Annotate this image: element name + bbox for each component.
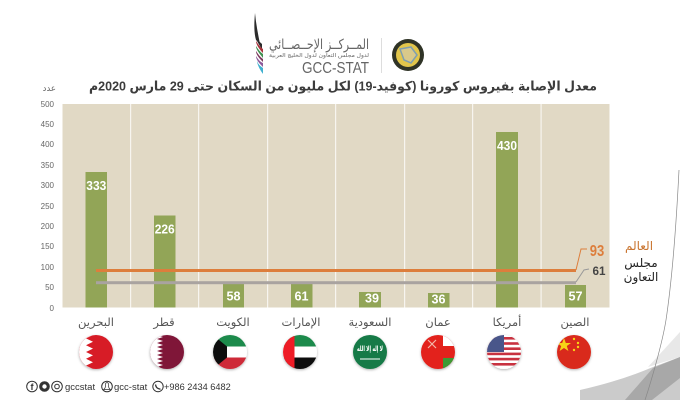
GCC average line	[96, 281, 576, 284]
flag: China	[557, 335, 591, 369]
flag: UAE	[283, 335, 317, 369]
country labels: الإمارات	[282, 317, 320, 330]
icon: twitter	[39, 381, 50, 392]
icon: instagram	[52, 381, 62, 392]
country labels: عمان	[425, 317, 451, 329]
country labels: قطر	[152, 317, 175, 330]
bar: Qatar 226: 226	[155, 222, 175, 236]
bar: UAE 61: 61	[294, 288, 308, 304]
value: world 93: 93	[590, 243, 604, 260]
logo GCC-STAT wordmark: GCC-STAT	[302, 60, 369, 77]
y-axis labels: 250	[41, 202, 55, 211]
logo: GCC-STAT	[254, 13, 424, 77]
y-axis labels	[41, 100, 55, 313]
flag: Qatar	[150, 335, 184, 369]
social contact bar	[27, 381, 231, 393]
bar: China 57	[565, 285, 586, 308]
logo ribbon	[254, 13, 263, 74]
bar: Oman 36: 36	[432, 292, 446, 306]
icon: snapchat	[102, 381, 112, 392]
decorative corner swoosh	[580, 170, 680, 400]
flag: Oman	[421, 335, 455, 369]
y-axis labels: 100	[41, 263, 55, 272]
handle: gccstat: gccstat	[65, 382, 95, 393]
logo Arabic name: المــركــز الإحــصــائي	[269, 36, 369, 53]
icon: facebook: f	[30, 382, 34, 392]
bar: USA 430	[496, 132, 518, 308]
bar: Oman 36	[428, 292, 450, 308]
flag: Bahrain	[79, 335, 113, 369]
bar chart	[62, 104, 610, 308]
y-axis labels: 0	[50, 304, 55, 313]
y-axis labels: 400	[41, 140, 55, 149]
bar: Saudi Arabia 39: 39	[365, 290, 379, 306]
icon: whatsapp	[153, 381, 163, 392]
country labels	[78, 314, 589, 330]
country labels: الكويت	[216, 317, 250, 330]
flag: Saudi Arabia: لا إله إلا الله	[357, 344, 383, 353]
bar: Kuwait 58: 58	[226, 288, 240, 304]
legend: GCC: مجلس	[624, 256, 658, 271]
y-axis labels: 150	[41, 242, 55, 251]
value: GCC 61: 61	[592, 266, 606, 278]
handle: gcc-stat: gcc-stat	[114, 382, 148, 393]
bar: China 57: 57	[568, 288, 582, 304]
bar: Qatar 226	[154, 216, 176, 308]
logo subtitle: لدول مجلس التعاون لدول الخليج العربية	[269, 53, 369, 59]
y-axis labels: 450	[41, 120, 55, 129]
legend: GCC	[624, 256, 658, 285]
country labels: السعودية	[349, 317, 391, 330]
plot area	[62, 104, 610, 308]
bar: Bahrain 333	[86, 172, 107, 308]
title: معدل الإصابة بفيروس كورونا (كوفيد-19) لكل مليون من السكان حتى 29 مارس 2020م	[89, 78, 597, 94]
leader: world	[576, 249, 587, 270]
bar: Saudi Arabia 39	[359, 290, 381, 308]
bar: Bahrain 333: 333	[86, 178, 106, 193]
y-axis labels: 500	[41, 100, 55, 109]
logo divider	[381, 38, 382, 73]
y-axis labels: 300	[41, 181, 55, 190]
y-axis labels: 50	[45, 283, 55, 292]
icon: facebook	[27, 381, 37, 392]
y-axis labels: 350	[41, 161, 55, 170]
bar: USA 430: 430	[497, 138, 517, 153]
bar: UAE 61	[291, 283, 312, 308]
bar: Kuwait 58	[223, 284, 244, 308]
legend: GCC: التعاون	[624, 270, 658, 285]
legend: world: العالم	[625, 239, 653, 253]
flag: Kuwait	[213, 335, 247, 369]
country labels: البحرين	[78, 317, 114, 330]
country labels: أمريكا	[493, 314, 521, 330]
flag: USA	[487, 335, 521, 369]
flag: Saudi Arabia	[353, 335, 387, 369]
phone number: +986 2434 6482	[164, 382, 231, 392]
country labels: الصين	[561, 317, 589, 330]
world average line	[96, 269, 576, 272]
y-axis labels: 200	[41, 222, 55, 231]
leader: GCC	[576, 269, 589, 282]
y-axis unit label: عدد	[43, 83, 56, 93]
logo GCC emblem	[392, 39, 424, 71]
